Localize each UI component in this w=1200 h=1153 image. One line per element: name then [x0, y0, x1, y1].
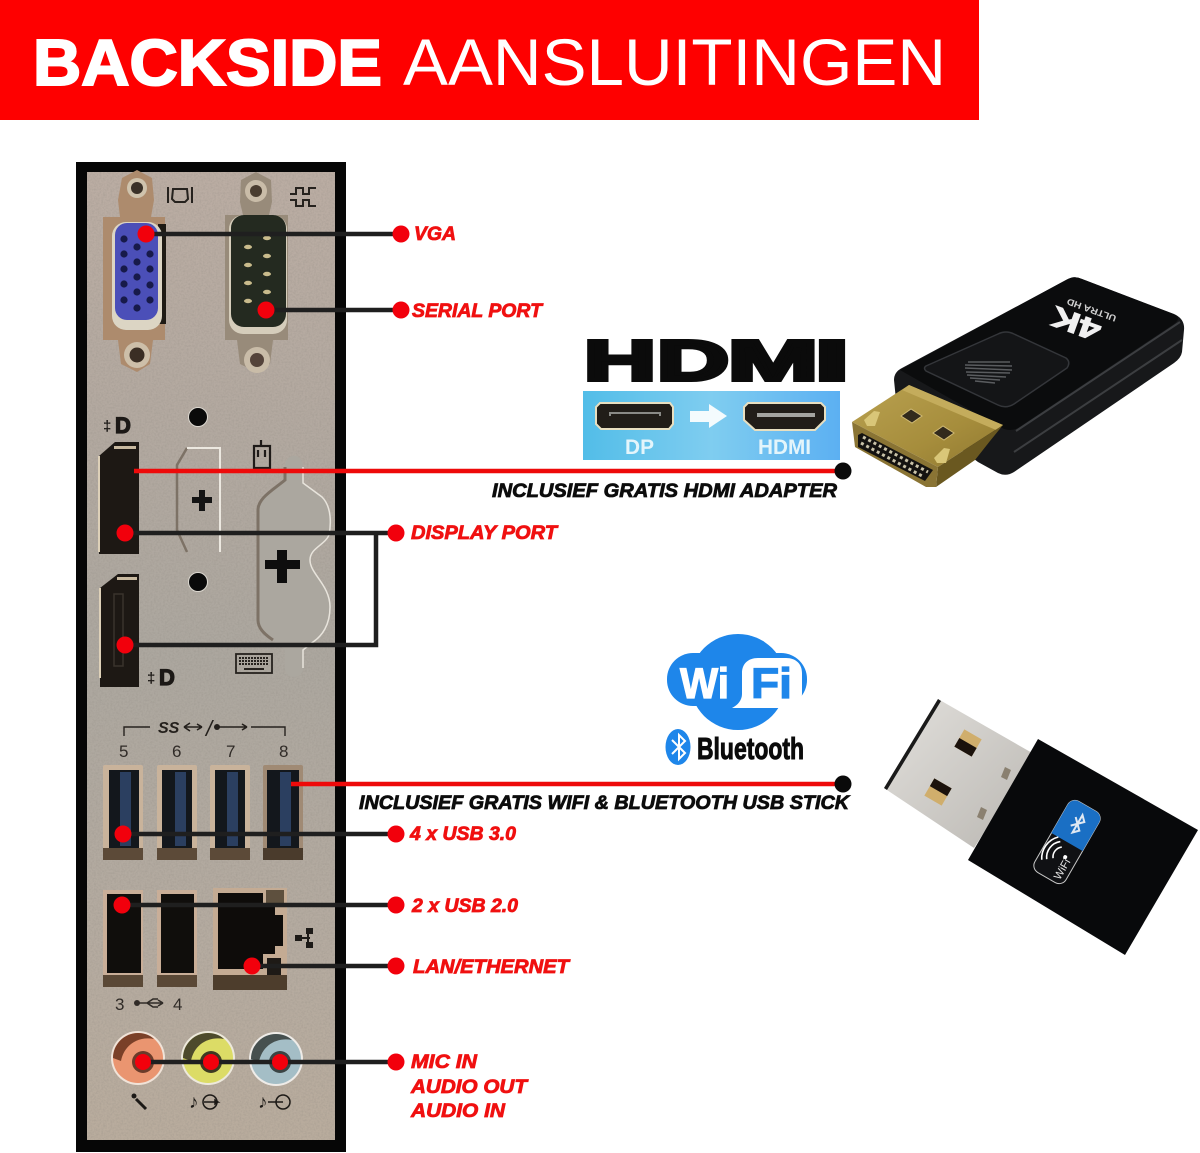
icon: serial symbol: [290, 188, 316, 206]
logo: WiFi: Fi: [751, 660, 792, 708]
label: audio ports: AUDIO IN: [410, 1100, 506, 1122]
icon: large knockout: [258, 456, 330, 677]
gold plug top: [852, 385, 1003, 467]
text: USB port numbers: [119, 742, 288, 761]
text: USB 3 and 4: [115, 995, 182, 1014]
ports: two USB 2.0: [103, 890, 197, 987]
product: DisplayPort to HDMI adapter: [852, 277, 1184, 487]
markers: red dots on ports and labels: [114, 226, 410, 1070]
label: serial port: SERIAL PORT: [412, 300, 544, 322]
label: VGA: VGA: [414, 223, 456, 245]
icon: DisplayPort logo top: [103, 413, 131, 438]
label: audio ports: AUDIO OUT: [410, 1076, 529, 1098]
label: audio ports: [410, 1051, 529, 1122]
label: LAN/ethernet: LAN/ETHERNET: [413, 956, 571, 978]
logo: HDMI wordmark: M: [728, 329, 818, 393]
port: audio in jack: [249, 1032, 303, 1086]
adapter grip pattern: [965, 362, 1012, 383]
port: mic audio jack: [111, 1031, 165, 1085]
panel: DP to HDMI graphic: [583, 391, 840, 460]
panel: DP to HDMI graphic: DP: [625, 436, 654, 459]
port: serial connector: [225, 172, 288, 373]
title banner: [0, 0, 979, 120]
connector lines: black leader lines: [122, 234, 401, 1062]
markers: black end dots: [834, 462, 852, 792]
caption: HDMI adapter: INCLUSIEF GRATIS HDMI ADAPTER: [492, 480, 837, 502]
logo: HDMI wordmark: D: [657, 329, 729, 393]
icon: USB bracket header: SS: [158, 720, 180, 737]
text: USB port numbers: 6: [172, 742, 181, 761]
badge: WiFi: [1052, 857, 1073, 882]
plug latch holes: [901, 409, 954, 440]
plug edge: [884, 699, 941, 790]
icon: audio symbols: ♪: [258, 1092, 268, 1113]
product: WiFi Bluetooth USB stick: [884, 699, 1198, 955]
text: USB 3 and 4: 4: [173, 995, 182, 1014]
icon: network symbol: [295, 928, 313, 948]
panel: computer back plate: [76, 162, 346, 1152]
icon: DisplayPort logo bottom: D: [159, 665, 175, 690]
title banner: AANSLUITINGEN: [403, 25, 946, 99]
icon: printer symbol: [254, 440, 270, 468]
connector lines: red adapter leader lines: [134, 471, 840, 784]
plug contact hole lower: [924, 778, 952, 806]
plug front face: [852, 422, 938, 487]
label: 4 x USB 3.0: 4 x USB 3.0: [409, 823, 516, 845]
adapter latch: [924, 332, 1069, 407]
logo: HDMI wordmark: I: [815, 329, 849, 393]
gold plug band: [902, 385, 1003, 430]
icon: audio symbols: ♪: [189, 1092, 198, 1113]
logo: WiFi: [667, 634, 807, 730]
logo: Bluetooth: Bluetooth: [697, 731, 804, 766]
text: USB port numbers: 7: [226, 742, 235, 761]
icon: DisplayPort logo bottom: [147, 665, 175, 690]
text: 4K: 4K: [1047, 299, 1105, 346]
logo: HDMI wordmark: H: [584, 329, 656, 393]
port: DisplayPort 1: [99, 442, 139, 554]
text: USB 3 and 4: 3: [115, 995, 124, 1014]
icon: DisplayPort logo top: D: [115, 413, 131, 438]
icon: audio symbols: [132, 1092, 290, 1113]
port: audio out jack: [181, 1031, 235, 1085]
logo: WiFi: Wi: [680, 660, 729, 708]
icon: DisplayPort logo top: ‡: [103, 418, 111, 435]
label: 2 x USB 2.0: 2 x USB 2.0: [411, 895, 518, 917]
title banner: BACKSIDE: [33, 26, 382, 99]
plug clips: [864, 411, 950, 463]
caption: wifi and bluetooth stick: INCLUSIEF GRATIS WIFI & BLUETOOTH USB STICK: [359, 792, 851, 814]
adapter edge highlights: [1014, 322, 1182, 452]
USB plug: [884, 699, 1034, 848]
icon: knockout holes: [188, 408, 208, 592]
text: ultra HD: ULTRA HD: [1065, 296, 1118, 324]
icon: DisplayPort logo bottom: ‡: [147, 670, 155, 687]
ports: four USB 3.0: [103, 765, 303, 860]
plug contact face: [858, 433, 933, 481]
port: VGA connector: [103, 170, 166, 372]
text: USB port numbers: 8: [279, 742, 288, 761]
logo: Bluetooth: [666, 729, 804, 766]
logo: HDMI wordmark: [584, 329, 849, 393]
adapter body silhouette: [894, 277, 1184, 475]
icon: USB bracket header: [124, 716, 285, 741]
icon: USB bracket header: /: [204, 716, 214, 741]
gold plug underside: [936, 425, 1003, 487]
plug small slots: [977, 767, 1011, 820]
port: DisplayPort 2: [100, 574, 139, 687]
plug contact hole upper: [954, 729, 982, 757]
icon: small knockout: [177, 448, 220, 552]
icon: VGA symbol: [168, 187, 192, 203]
port: LAN ethernet: [213, 888, 287, 990]
panel: DP to HDMI graphic: HDMI: [758, 436, 811, 459]
label: audio ports: MIC IN: [411, 1051, 478, 1073]
text: USB port numbers: 5: [119, 742, 128, 761]
plug pins: [861, 437, 928, 477]
icon: keyboard symbol: [236, 654, 272, 673]
badge: [1031, 797, 1103, 887]
adapter top face: [900, 277, 1178, 430]
label: display port: DISPLAY PORT: [411, 522, 559, 544]
stick body: [968, 739, 1198, 955]
